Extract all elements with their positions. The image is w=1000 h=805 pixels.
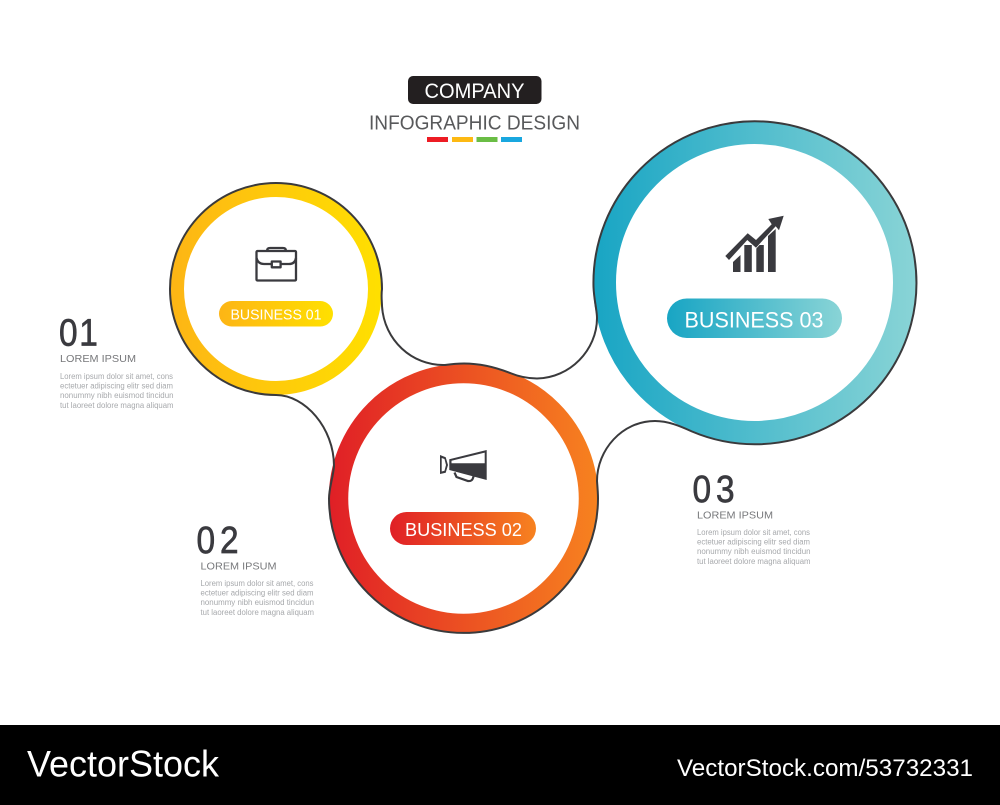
body copy: nonummy nibh euismod tincidun: [200, 598, 314, 607]
number 01: 01: [59, 312, 98, 354]
body copy: [200, 579, 314, 617]
number 02: 02: [196, 519, 239, 561]
card: business 02: [390, 450, 536, 545]
footer logo text: VectorStock: [27, 744, 219, 784]
body copy: nonummy nibh euismod tincidun: [697, 547, 810, 556]
title badge: company: [408, 76, 542, 104]
label: LOREM IPSUM: [697, 510, 773, 522]
label: LOREM IPSUM: [60, 353, 136, 365]
pill: business 01: BUSINESS 01: [230, 307, 322, 323]
body copy: ectetuer adipiscing elitr sed diam: [697, 538, 810, 546]
body copy: tut laoreet dolore magna aliquam: [200, 608, 314, 617]
ring: red circle: [338, 374, 588, 624]
card: business 01: [219, 248, 333, 326]
ring: teal circle: [604, 132, 904, 432]
label: LOREM IPSUM: [200, 560, 276, 572]
pill: business 03: BUSINESS 03: [684, 308, 824, 332]
pill: business 03: [667, 298, 842, 338]
body copy: tut laoreet dolore magna aliquam: [697, 557, 811, 566]
title badge: company: COMPANY: [424, 80, 524, 103]
title: company infographic design: [369, 76, 580, 142]
text block: 03: [692, 468, 811, 566]
body copy: [697, 528, 811, 566]
icon: megaphone: [440, 450, 487, 481]
body copy: ectetuer adipiscing elitr sed diam: [200, 588, 314, 598]
body copy: nonummy nibh euismod tincidun: [60, 391, 174, 400]
number 03: 03: [692, 468, 735, 510]
body copy: Lorem ipsum dolor sit amet, cons: [697, 528, 810, 537]
connecting outline: [170, 121, 916, 633]
subtitle: INFOGRAPHIC DESIGN: [369, 111, 580, 134]
body copy: [60, 372, 174, 410]
body copy: Lorem ipsum dolor sit amet, cons: [200, 579, 314, 588]
pill: business 02: [390, 512, 536, 545]
ring: yellow circle: [177, 190, 375, 388]
body copy: tut laoreet dolore magna aliquam: [60, 401, 174, 410]
footer url text: VectorStock.com/53732331: [677, 755, 973, 782]
body copy: ectetuer adipiscing elitr sed diam: [60, 382, 173, 390]
body copy: Lorem ipsum dolor sit amet, cons: [60, 372, 173, 381]
colour swatches: [427, 137, 522, 142]
card: business 03: [667, 216, 842, 338]
text block: 02: [196, 519, 314, 617]
icon: briefcase: [256, 248, 296, 280]
text block: 01: [59, 312, 174, 410]
pill: business 02: BUSINESS 02: [405, 519, 522, 540]
footer bar: [0, 725, 1000, 805]
icon: rising chart: [725, 216, 784, 272]
